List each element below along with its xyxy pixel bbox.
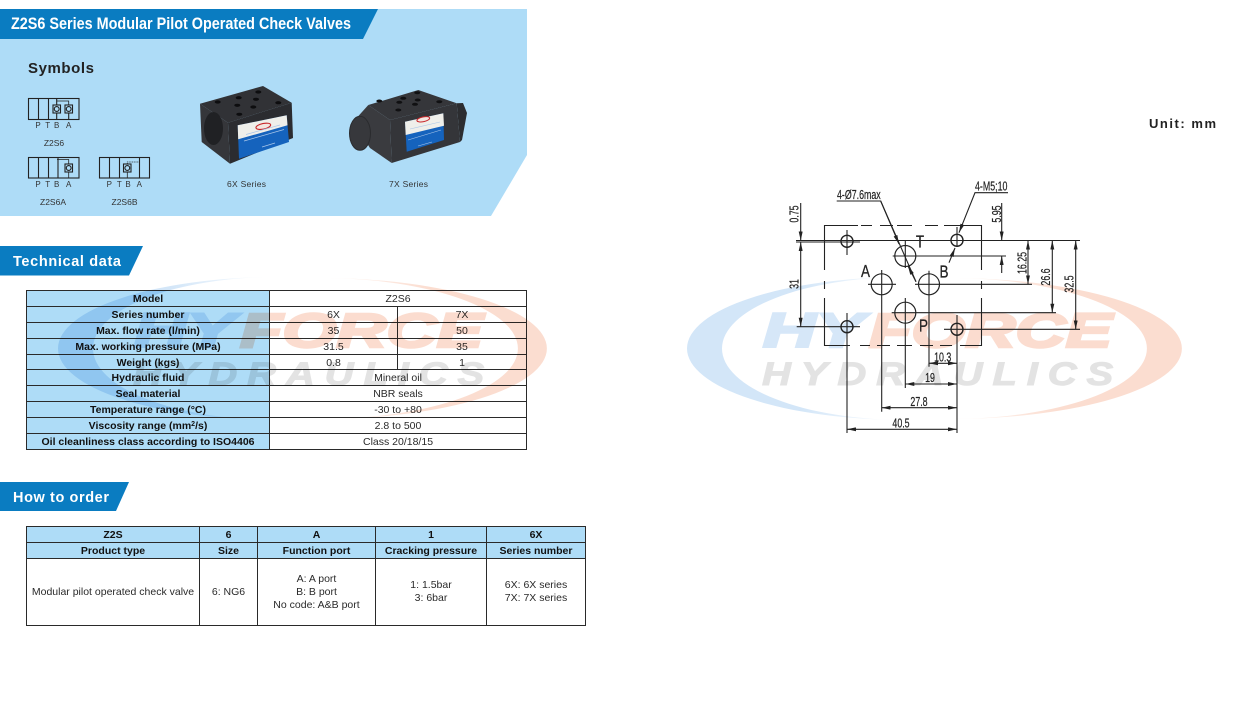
table: technical data: Class 20/18/15: [363, 436, 433, 448]
watermark: left logo: HYDRAULICS: [133, 356, 484, 392]
port letters: A: [861, 262, 870, 282]
symbol: Z2S6B: A: [137, 180, 143, 189]
valve body outline (dashed): [824, 226, 982, 346]
port letters: P: [919, 317, 928, 336]
table: technical data: Model: [133, 293, 163, 305]
table: how to order: 6X: [530, 529, 542, 541]
dimension labels: 31: [788, 279, 802, 289]
product photo: 6X series valve: [200, 86, 293, 164]
table: technical data: NBR seals: [373, 388, 423, 400]
watermark: right logo: HYDRAULICS: [762, 356, 1113, 392]
table: technical data: [26, 290, 527, 450]
symbol: Z2S6B: [100, 158, 150, 207]
table: how to order: Modular pilot operated check valve: [32, 586, 194, 598]
table: how to order: 6X: 6X series: [505, 579, 567, 591]
symbol: Z2S6B: T: [117, 180, 122, 189]
symbol: Z2S6: Z2S6: [44, 138, 64, 148]
symbol: Z2S6A: B: [54, 180, 59, 189]
table: technical data: 35: [456, 341, 468, 353]
watermark: left logo: FORCE: [240, 305, 486, 358]
title banner: Z2S6 Series Modular Pilot Operated Check Valves: [11, 15, 351, 33]
caption: 7X Series: 7X Series: [389, 179, 428, 189]
table: how to order: 6: [226, 529, 231, 541]
dimension labels: 27.8: [910, 395, 928, 410]
dimension labels: 26.6: [1039, 268, 1054, 286]
unit label: Unit: mm: [1149, 116, 1216, 131]
dimension labels: 16.25: [1016, 252, 1030, 274]
table: how to order: Product type: [81, 545, 145, 557]
dimension labels: 19: [925, 371, 935, 386]
watermark: left logo: HY: [134, 305, 241, 358]
table: technical data: Hydraulic fluid: [112, 372, 184, 384]
table: technical data: Viscosity range (mm2/s): [89, 420, 207, 432]
table: how to order: 1: 1.5bar: [410, 579, 452, 591]
symbol: Z2S6B: P: [107, 180, 112, 189]
port letters: T: [916, 233, 924, 252]
symbol: Z2S6A: P: [35, 180, 41, 189]
table: technical data: Max. flow rate (l/min): [96, 325, 200, 337]
caption: 6X Series: 6X Series: [227, 179, 266, 189]
title banner: [0, 9, 378, 39]
heading: symbols: Symbols: [28, 60, 94, 77]
symbol: Z2S6A: [28, 158, 79, 207]
table: how to order: 7X: 7X series: [505, 592, 567, 604]
table: technical data: Oil cleanliness class according to ISO4406: [41, 436, 254, 448]
heading banner: how to order: How to order: [13, 490, 109, 506]
table: how to order: A: A port: [297, 572, 336, 584]
watermark: right logo: FORCE: [869, 305, 1115, 358]
table: how to order: A: [313, 529, 320, 541]
symbol: Z2S6: B: [54, 121, 59, 130]
symbol: Z2S6: T: [45, 121, 50, 130]
dimension labels: [788, 180, 1077, 431]
table: technical data: 2.8 to 500: [375, 420, 421, 432]
table: technical data: 35: [328, 325, 339, 337]
symbol: Z2S6A: T: [45, 180, 50, 189]
port holes: [871, 246, 940, 323]
table: how to order: [26, 526, 586, 626]
heading banner: technical data: Technical data: [13, 254, 122, 270]
table: technical data: 31.5: [323, 341, 344, 353]
table: technical data: Temperature range (°C): [90, 404, 206, 416]
table: how to order: Series number: [500, 545, 572, 557]
dimension labels: 10.3: [934, 351, 951, 365]
dimension labels: 5.95: [990, 205, 1005, 223]
port letters: B: [939, 263, 949, 282]
table: how to order: 1: [428, 529, 434, 541]
panel background: [0, 9, 527, 216]
table: technical data: Z2S6: [385, 293, 411, 305]
table: technical data: Seal material: [116, 388, 180, 400]
table: technical data: Mineral oil: [374, 372, 422, 384]
table: technical data: 7X: [456, 309, 468, 321]
leader lines: [837, 201, 916, 282]
table: technical data: -30 to +80: [374, 404, 422, 416]
extension and centre lines: [796, 240, 1080, 329]
table: how to order: Function port: [283, 545, 350, 557]
table: how to order: Z2S: [103, 529, 123, 541]
watermark: right logo: HY: [763, 305, 870, 358]
table: how to order: Size: [218, 545, 239, 557]
dimension labels: 32.5: [1063, 275, 1077, 293]
symbol: Z2S6: A: [66, 121, 72, 130]
dimension labels: 4-M5;10: [975, 180, 1007, 194]
dimension arrows: [801, 203, 1076, 429]
symbol: Z2S6: [28, 98, 79, 148]
symbol: Z2S6B: Z2S6B: [112, 197, 138, 207]
symbol: Z2S6A: Z2S6A: [40, 197, 66, 207]
product photo: 7X series valve: [350, 90, 467, 163]
table: how to order: No code: A&B port: [273, 598, 360, 610]
dimension labels: 4-Ø7.6max: [837, 188, 881, 203]
table: how to order: Cracking pressure: [385, 545, 477, 557]
symbol: Z2S6B: B: [125, 180, 131, 189]
symbol: Z2S6A: A: [66, 180, 72, 189]
dimension labels: 0.75: [788, 205, 802, 223]
table: technical data: Weight (kgs): [117, 356, 179, 368]
table: technical data: Max. working pressure (MPa): [75, 341, 221, 353]
table: technical data: 50: [456, 325, 468, 337]
table: technical data: Series number: [112, 309, 184, 321]
dimension labels: 40.5: [892, 417, 910, 431]
table: technical data: 1: [459, 356, 465, 368]
table: how to order: B: B port: [296, 586, 337, 598]
table: technical data: 0.8: [326, 356, 341, 368]
mounting holes: [841, 234, 963, 335]
table: how to order: 6: NG6: [212, 586, 245, 598]
port letters: [861, 233, 949, 336]
table: how to order: 3: 6bar: [415, 592, 447, 604]
table: technical data: 6X: [327, 309, 340, 321]
symbol: Z2S6: P: [35, 121, 41, 130]
